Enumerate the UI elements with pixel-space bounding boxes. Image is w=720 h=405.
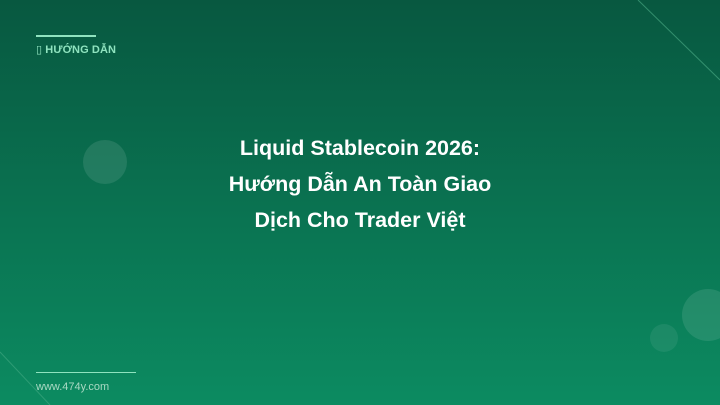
title: Liquid Stablecoin 2026: bbox=[240, 136, 480, 160]
bottom accent line bbox=[36, 372, 136, 373]
title bbox=[229, 136, 491, 232]
title: Dịch Cho Trader Việt bbox=[254, 208, 466, 232]
top accent line bbox=[36, 35, 96, 37]
category label: ▯ HƯỚNG DẪN bbox=[36, 44, 116, 56]
title: Hướng Dẫn An Toàn Giao bbox=[229, 172, 491, 196]
footer url: www.474y.com bbox=[36, 381, 109, 393]
